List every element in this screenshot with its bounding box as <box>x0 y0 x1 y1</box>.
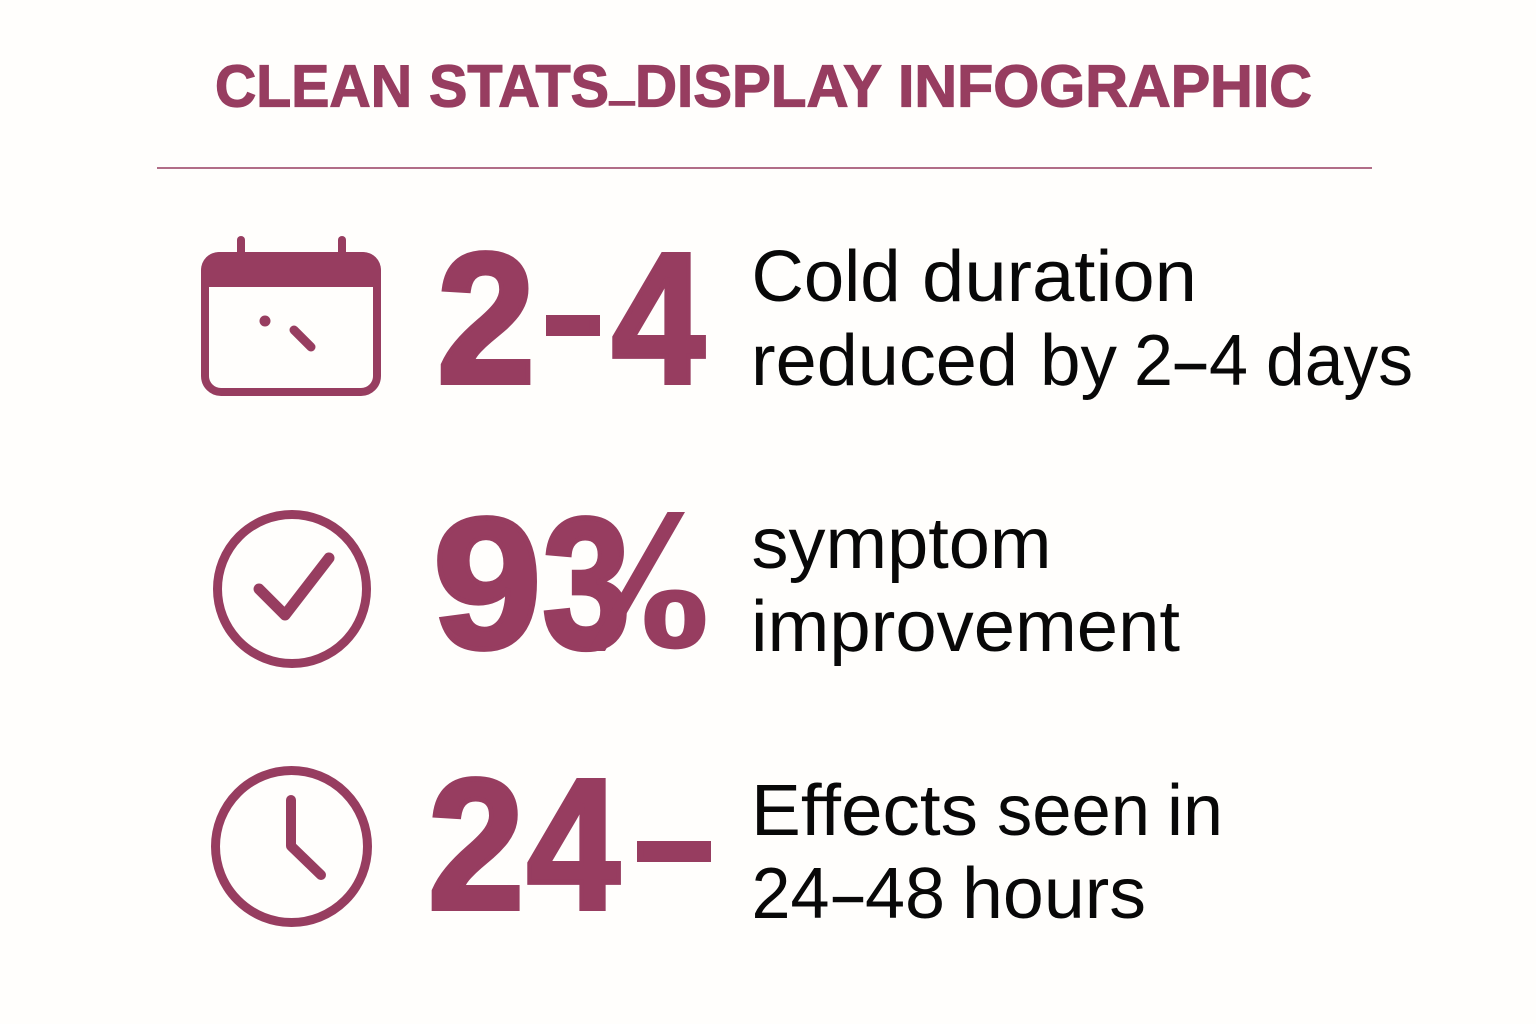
description: effects timing: 48 <box>865 854 945 934</box>
description: cold duration: 4 <box>1209 321 1248 401</box>
title: DISPLAY <box>635 54 882 120</box>
description: effects timing: Effects <box>751 771 978 851</box>
stat: 93%: % <box>560 529 708 675</box>
stat: 2-4 <box>437 215 705 423</box>
stat: 93%: 3 <box>542 479 630 687</box>
title: INFOGRAPHIC <box>898 54 1312 120</box>
stat: 2-4: - <box>560 262 593 374</box>
description: cold duration: duration <box>922 237 1197 317</box>
title: CLEAN <box>215 54 412 120</box>
stat: 24- <box>428 741 711 949</box>
description: cold duration: days <box>1266 321 1413 401</box>
description: effects timing: in <box>1167 771 1223 851</box>
stat: 93% <box>437 512 706 652</box>
row: effects timing <box>216 741 1223 949</box>
icon: check circle <box>218 514 366 664</box>
stat: 93%: 9 <box>433 480 542 687</box>
title: _ <box>609 44 635 110</box>
title: STATS <box>429 54 609 120</box>
icon: clock <box>216 770 368 922</box>
description: effects timing: – <box>833 854 864 934</box>
description: effects timing: hours <box>962 854 1146 934</box>
stat: 24-: – <box>640 775 707 909</box>
description: effects timing: 24 <box>752 854 830 934</box>
icon: calendar <box>201 240 381 392</box>
description: cold duration: Cold <box>752 237 900 317</box>
description: symptom improvement: improvement <box>751 587 1180 667</box>
description: cold duration: reduced <box>751 321 1018 401</box>
description: cold duration: 2 <box>1134 321 1173 401</box>
description: cold duration: by <box>1040 321 1117 401</box>
row: cold duration <box>201 215 1413 423</box>
stat: 2-4: 2 <box>437 215 535 423</box>
stat: 24-: 4 <box>527 741 620 949</box>
description: symptom improvement: symptom <box>752 504 1052 584</box>
description: effects timing: seen <box>997 771 1150 851</box>
stat: 2-4: 4 <box>612 215 705 423</box>
stat: 24-: 2 <box>428 741 524 949</box>
description: cold duration: – <box>1175 321 1207 401</box>
row: symptom improvement <box>213 510 1180 668</box>
